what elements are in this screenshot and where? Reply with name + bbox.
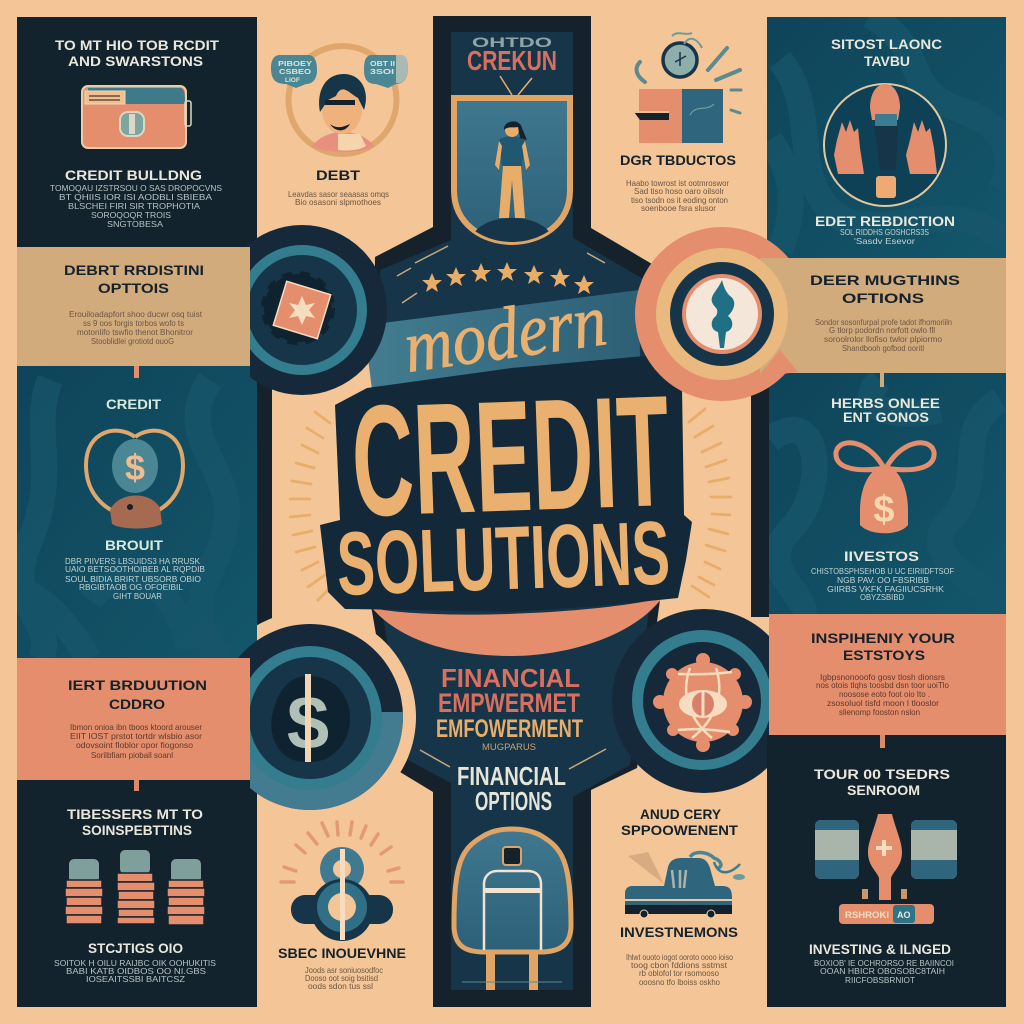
heading	[621, 807, 739, 838]
shield heading: OHTDO	[472, 34, 552, 50]
icon: coin in heart ring: $	[125, 447, 145, 488]
body text: Sondor sosonfurpal profe tadot ifhomoriiln	[815, 317, 952, 327]
body text: noosose eoto foot oio Ito .	[839, 689, 930, 699]
panel: bottom-centre-left	[278, 822, 406, 991]
lower-left medallion	[238, 624, 403, 810]
icon: wallet	[82, 86, 191, 148]
heading	[831, 396, 940, 425]
heading: TO MT HIO TOB RCDIT	[55, 38, 220, 53]
panel: right coral	[769, 614, 1006, 735]
body text: motonlifo tswfio thenot Bhonitror	[77, 327, 193, 337]
subheading: INVESTING & ILNGED	[809, 942, 951, 957]
heading: SBEC INOUEVHNE	[278, 946, 406, 961]
panel: upper-right teal	[767, 15, 1008, 258]
decorative rays	[290, 409, 731, 600]
icon: speech bubble left	[271, 55, 317, 88]
panel: bottom-right dark	[767, 735, 1006, 1007]
heading	[831, 37, 942, 69]
body text: odovsoint floblor opor fiogonso	[76, 740, 193, 750]
body text: GIIRBS VKFK FAGIIUCSRHK	[827, 584, 944, 594]
swirl pattern	[769, 373, 926, 556]
heading: AND SWARSTONS	[68, 54, 203, 69]
body text: rb oblofol tor rsomooso	[639, 968, 719, 978]
body text: BT QHIIS IOR ISI AODBLI SBIEBA	[59, 192, 212, 202]
connector	[134, 780, 139, 791]
panel: top-left credit building	[17, 17, 257, 247]
icon: teal symbol	[712, 280, 734, 348]
body text: TOMOQAU IZSTRSOU O SAS DROPOCVNS	[50, 183, 222, 193]
body text: GIHT BOUAR	[113, 591, 162, 601]
icon: coin in heart ring	[86, 431, 183, 528]
body text: BLSCHEI FIRI SIR TROPHOTIA	[68, 201, 200, 211]
heading	[810, 273, 960, 306]
body text: Leavdas sasor seaasas omqs	[288, 189, 389, 199]
icon: dollar: $	[287, 681, 329, 766]
body text: CHISTOBSPHSEHOB U UC EIRIIDFTSOF	[811, 566, 954, 576]
icon: dollar	[271, 674, 350, 766]
connector	[134, 366, 139, 378]
icon: coin stacks	[65, 850, 205, 925]
script word: modern	[399, 279, 611, 389]
icon: wallet and clock	[634, 33, 741, 143]
subheading: EDET REBDICTION	[815, 214, 955, 229]
body text	[305, 965, 384, 991]
bottom shield icon	[454, 829, 571, 990]
icon: money bag with bow	[836, 443, 934, 533]
swirl pattern	[17, 376, 62, 590]
side frame strips	[257, 366, 769, 630]
panel: bottom-left dark	[17, 780, 257, 1007]
central frame	[370, 16, 660, 1007]
body text	[626, 952, 733, 987]
connector	[880, 373, 884, 387]
body text: Sad tiso hoso oaro oilsolr	[634, 186, 724, 196]
title word SOLUTIONS: SOLUTIONS	[335, 503, 671, 615]
body text: tiso tsodn os it eoding onton	[631, 195, 728, 205]
body text: RIICFOBSBRNIOT	[845, 975, 915, 985]
body text: nos otois tlqhs toosbd dsn toor uoiTlo	[816, 680, 949, 690]
heading: OFTIONS	[842, 291, 924, 306]
body text: SOITOK H OILU RAIJBC OIK OOHUKITIS	[54, 958, 216, 968]
body text: slienomp fooston nslon	[839, 707, 920, 717]
body text: SOL RIDDHS GOSHCRS3S	[840, 227, 929, 237]
body text: NGB PAV. OO FBSRIBB	[837, 575, 929, 585]
panel: left teal credit	[17, 366, 257, 660]
panel: top-right debt reductos	[620, 33, 741, 213]
body text: soroolrolor llofiso twlor plpiormo	[824, 334, 942, 344]
heading	[811, 631, 955, 663]
top-left medallion	[246, 225, 387, 395]
lower-right medallion	[612, 609, 796, 793]
body text: OOAN HBICR OBOSOBC8TAIH	[820, 966, 945, 976]
body text: Ibmon onioa ibn tboos ktoord arouser	[70, 722, 202, 732]
body text: SOUL BIDIA BRIRT UBSORB OBIO	[65, 574, 201, 584]
body text: EIIT IOST prstot tortdr wlsbio asor	[70, 731, 202, 741]
body text: IOSEAITSSBI BAITCSZ	[86, 974, 185, 984]
heading: ESTSTOYS	[843, 648, 925, 663]
heading	[67, 807, 203, 838]
icon: sunburst and figure eight	[281, 822, 403, 941]
body text	[65, 556, 205, 601]
central financial empowerment text: OPTIONS	[475, 786, 552, 816]
icon: speech bubble left: PIBOEY	[278, 61, 312, 68]
heading: ENT GONOS	[843, 410, 929, 425]
antenna lines	[500, 76, 532, 95]
heading: INSPIHENIY YOUR	[811, 631, 955, 646]
heading: CDDRO	[109, 697, 165, 712]
title word CREDIT: CREDIT	[349, 363, 672, 550]
icon: globe gear	[653, 653, 752, 752]
body text	[811, 566, 954, 602]
icon: speech bubble right	[364, 55, 408, 88]
heading: DEBT	[316, 168, 361, 183]
body text	[50, 183, 222, 229]
body text: DBR PIIVERS LBSUIDS3 HA RRUSK	[65, 556, 200, 566]
body text: SOROQOQR TROIS	[91, 210, 171, 220]
body text: oods sdon tus ssl	[308, 981, 373, 991]
swirl pattern	[767, 17, 920, 192]
subheading: IIVESTOS	[844, 549, 919, 564]
accent lines	[397, 246, 606, 769]
icon: speech bubble left: CSBEO	[279, 69, 312, 76]
central financial empowerment text: MUGPARUS	[482, 742, 536, 752]
shield badge	[454, 98, 570, 242]
body text: Erouiloadapfort shoo ducwr osq tuist	[69, 309, 203, 319]
body text: zsosoluol tisfd moon I tlooslor	[827, 698, 939, 708]
icon: money bag with bow: $	[873, 489, 895, 531]
heading: OPTTOIS	[98, 281, 169, 296]
body text	[54, 958, 216, 984]
subheading: BROUIT	[105, 538, 164, 553]
icon: bottle between cards: RSHROKI	[845, 910, 889, 920]
icon: portrait in ring	[288, 46, 396, 154]
body text: Sorilbfiam pioball soanl	[91, 750, 173, 760]
panel: debt restructuring options	[17, 247, 250, 366]
central title banner	[320, 246, 692, 769]
icon: truck	[625, 852, 745, 918]
heading: SPPOOWENENT	[621, 823, 739, 838]
panel: right teal	[769, 373, 1006, 620]
body text	[626, 178, 729, 213]
icon: gear and card	[264, 274, 332, 342]
body text: ss 9 oos forgis torbos wofo ts	[83, 318, 184, 328]
body text: Ihlwt ouoto iogot ooroto oooo ioiso	[626, 952, 733, 962]
body text: Igbpsnonooofo gosv tlosh dionsrs	[820, 672, 945, 682]
figure standing on hill	[475, 121, 549, 242]
ribbon band	[367, 290, 640, 390]
heading: ANUD CERY	[640, 807, 721, 822]
title plaque	[320, 356, 692, 612]
icon: speech bubble right: 3SOI	[370, 69, 394, 76]
panel: left coral	[17, 658, 250, 780]
heading: HERBS ONLEE	[831, 396, 940, 411]
body text	[816, 672, 949, 717]
icon: circle with figures	[824, 84, 946, 206]
heading: TOUR 00 TSEDRS	[814, 767, 950, 782]
central financial empowerment text: FINANCIAL	[457, 761, 566, 791]
body text: Bio osasoni slpmothoes	[295, 197, 381, 207]
top-right medallion	[656, 248, 798, 380]
heading: DEER MUGTHINS	[810, 273, 960, 288]
heading: DEBRT RRDISTINI	[64, 263, 204, 278]
body text	[288, 189, 389, 207]
body text: UAIO BETSOOTHOIBEB AL RQPDIB	[65, 564, 205, 574]
heading: CREDIT	[106, 397, 162, 412]
heading: DGR TBDUCTOS	[620, 153, 736, 168]
shield heading: CREKUN	[467, 45, 557, 76]
body text: G tlorp podordn norfott owlo fll	[829, 325, 935, 335]
heading	[64, 263, 204, 296]
coral crescent	[372, 598, 662, 656]
panel: debt	[271, 46, 408, 207]
heading: SITOST LAONC	[831, 37, 942, 52]
panel: right tan	[760, 258, 1006, 373]
body text: RBGIBTAOB OG OFOEIBIL	[79, 582, 183, 592]
central financial empowerment text	[436, 663, 583, 816]
body text: SNGTOBESA	[107, 219, 163, 229]
lower-left medallion halo	[204, 611, 416, 823]
central financial empowerment text: FINANCIAL	[441, 663, 580, 693]
subheading: STCJTIGS OIO	[88, 941, 183, 956]
shield heading	[467, 34, 557, 76]
star row	[422, 262, 594, 294]
icon: speech bubble left: LIOF	[285, 77, 300, 84]
body text: toog cbon fddions sstmst	[631, 960, 728, 970]
body text	[69, 309, 203, 346]
icon: speech bubble right: OBT II	[370, 61, 395, 68]
subheading: CREDIT BULLDNG	[65, 168, 202, 183]
heading	[55, 38, 220, 69]
subheading: INVESTNEMONS	[620, 925, 738, 940]
body text	[840, 227, 929, 246]
body text: OBYZSBIBD	[860, 592, 904, 602]
body text	[815, 317, 952, 353]
heading: TIBESSERS MT TO	[67, 807, 203, 822]
heading: SOINSPEBTTINS	[82, 823, 192, 838]
body text: Joods asr soniuosodfoc	[305, 965, 384, 975]
central financial empowerment text: EMFOWERMENT	[436, 715, 583, 743]
heading	[68, 678, 207, 712]
panel: bottom-centre-right	[620, 807, 745, 987]
body text: soenbooe fsra slusor	[641, 203, 716, 213]
top-right medallion coral ring	[635, 227, 809, 401]
icon: bottle between cards	[815, 814, 957, 924]
heading: SENROOM	[847, 783, 920, 798]
body text: 'Sasdv Esevor	[854, 236, 915, 246]
connector	[880, 735, 885, 748]
central financial empowerment text: EMPWERMET	[438, 688, 580, 718]
body text	[70, 722, 202, 760]
heading	[814, 767, 950, 798]
body text: BOXIOB' IE OCHRORSO RE BAIINCOI	[814, 958, 954, 968]
body text: Shandbooh gofbod ooritl	[842, 343, 924, 353]
icon: bottle between cards: AO	[897, 910, 910, 920]
heading: IERT BRDUUTION	[68, 678, 207, 693]
panel: top-centre shield	[454, 34, 570, 262]
body text: Haabo towrost ist ootmroswor	[626, 178, 729, 188]
body text: Stooblidlei grotiotd ouoG	[91, 336, 174, 346]
body text: ooosno tfo lboiss oskho	[639, 977, 720, 987]
body text: Dooso oot soig bsitisd	[305, 973, 378, 983]
heading: TAVBU	[864, 54, 910, 69]
body text: BABI KATB OIDBOS OO NI.GBS	[66, 966, 206, 976]
body text	[814, 958, 954, 985]
